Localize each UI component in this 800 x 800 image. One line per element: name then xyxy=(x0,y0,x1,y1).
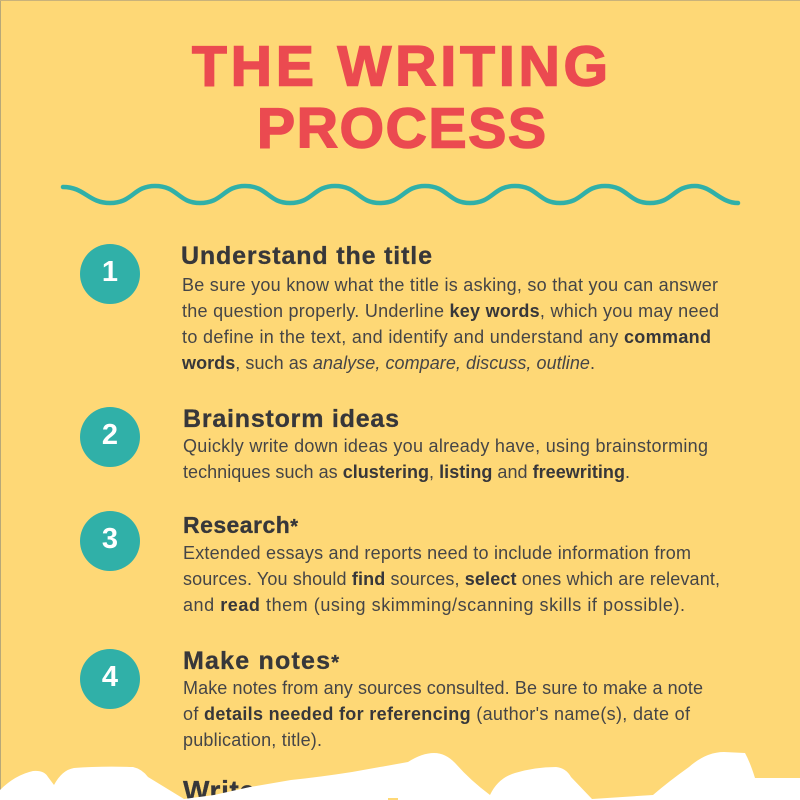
text: step 4 description: of details needed for referencing (author's name(s), date of xyxy=(183,704,691,724)
step 3 xyxy=(80,511,720,615)
icon: number 2 badge: 2 xyxy=(102,419,118,451)
text: step 3 description: Extended essays and reports need to include information from xyxy=(183,543,691,563)
text: step 2 description xyxy=(183,436,708,482)
title: THE WRITING xyxy=(192,34,608,98)
heading: research: Research* xyxy=(183,512,298,538)
text: step 3 description xyxy=(183,543,720,615)
text: step 4 description: Make notes from any sources consulted. Be sure to make a note xyxy=(183,678,703,698)
text: step 1 description: to define in the text, and identify and understand any command xyxy=(182,327,711,347)
text: step 2 description: Quickly write down ideas you already have, using brainstorming xyxy=(183,436,708,456)
icon: number 2 badge xyxy=(80,407,140,467)
text: step 1 description xyxy=(181,275,719,373)
icon: number 1 badge: 1 xyxy=(102,256,118,288)
heading: make notes: Make notes* xyxy=(183,647,339,675)
icon: number 3 badge: 3 xyxy=(102,523,118,555)
icon: number 4 badge: 4 xyxy=(102,661,118,693)
text: step 1 description: the question properly. Underline key words, which you may need xyxy=(182,301,719,321)
icon: number 4 badge xyxy=(80,649,140,709)
wavy divider xyxy=(63,186,738,203)
step 2 xyxy=(80,405,708,482)
icon: number 1 badge xyxy=(80,244,140,304)
text: step 2 description: techniques such as clustering, listing and freewriting. xyxy=(183,462,630,482)
text: step 3 description: sources. You should find sources, select ones which are relevant, xyxy=(183,569,720,589)
text: step 1 description: Be sure you know what the title is asking, so that you can answer xyxy=(182,275,718,295)
torn white paper edge xyxy=(0,752,800,800)
heading: understand the title: Understand the title xyxy=(181,242,432,270)
text: step 4 description: publication, title). xyxy=(183,730,322,750)
text: step 1 description: words, such as analyse, compare, discuss, outline. xyxy=(181,353,595,373)
step 1 xyxy=(80,242,719,373)
heading: brainstorm ideas: Brainstorm ideas xyxy=(183,405,399,433)
icon: number 3 badge xyxy=(80,511,140,571)
title: PROCESS xyxy=(257,96,546,160)
title xyxy=(192,34,608,160)
step 4 xyxy=(80,647,703,750)
text: step 3 description: and read them (using skimming/scanning skills if possible). xyxy=(183,595,685,615)
text: step 4 description xyxy=(183,678,703,750)
